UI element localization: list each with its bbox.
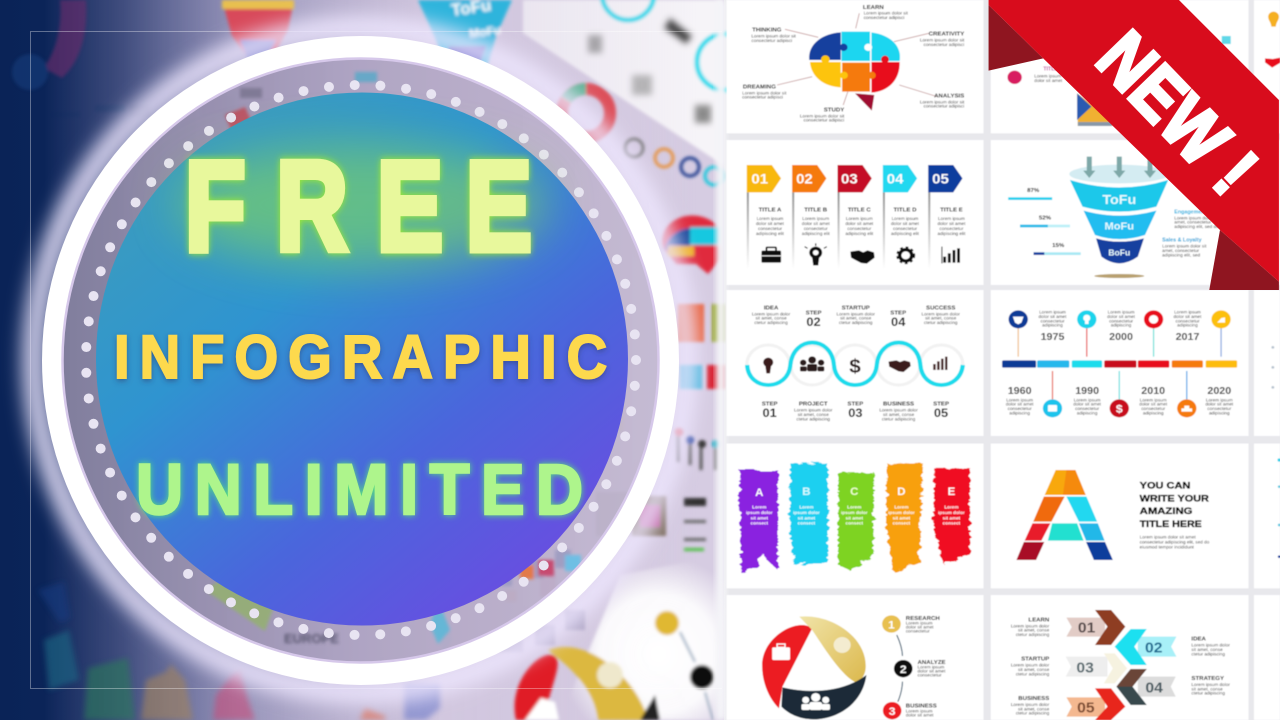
wave upper labels: sit amet, conse [925, 316, 956, 321]
chevron 01: 01 [1078, 620, 1096, 637]
timeline years and notes: consectetur [1040, 318, 1065, 323]
slide: third column top [1254, 0, 1280, 133]
wave upper labels: Lorem ipsum dolor [921, 311, 960, 316]
brain labels: Lorem ipsum dolor sit [920, 99, 964, 104]
wave upper labels: 04 [891, 315, 905, 329]
chevron labels: sit amet, conse [1018, 667, 1049, 672]
numbered badges: 1 [888, 619, 895, 631]
heading: FREE: FREE [185, 136, 532, 278]
bottom collage glimpses: EUROPE [284, 631, 339, 646]
tag 01: 01 [751, 172, 768, 187]
slide: partly hidden by ribbon: Lorem ipsum [1034, 73, 1061, 78]
ring inner lilac edge [62, 58, 658, 662]
percentage bars: 87% [1027, 187, 1039, 193]
tag 01 [747, 165, 781, 269]
badge labels: consectetur [917, 673, 942, 678]
tag text columns: dolor sit amet [802, 221, 830, 226]
funnel shadow [1094, 274, 1144, 278]
slide: third column bottom [1254, 595, 1280, 720]
tag 02: 02 [796, 172, 813, 187]
chevron 04 [1116, 669, 1176, 705]
icon: segmented letter A [1016, 470, 1113, 560]
wave lower labels: STEP [933, 400, 949, 407]
icon: handshake [889, 360, 911, 372]
chevron labels: ctetur adipiscing [1016, 632, 1049, 637]
chevron labels [1011, 616, 1230, 716]
title body text: Lorem ipsum dolor sit amet [1140, 535, 1196, 540]
title: you can write your amazing title here: TITLE HERE [1140, 519, 1202, 530]
timeline bar [1002, 360, 1237, 368]
brush letters and text: sit amet [893, 515, 910, 520]
brush letters and text: Lorem [944, 504, 959, 509]
funnel side text: Sales & Loyalty [1162, 238, 1202, 244]
slide: third column row three [1254, 290, 1280, 436]
title: you can write your amazing title here: WRITE YOUR [1140, 494, 1209, 504]
chevron labels: STRATEGY [1191, 675, 1224, 681]
slide: paint brushes [726, 443, 984, 588]
timeline years and notes: adipiscing [1077, 410, 1097, 415]
tag 04: 04 [887, 172, 903, 187]
timeline years and notes: Lorem ipsum [1039, 310, 1066, 315]
brush letters and text: sit amet [751, 515, 768, 520]
brain labels: consectetur adipisci [864, 15, 904, 20]
brain labels: Lorem ipsum dolor sit [920, 38, 964, 43]
percentage bars: 15% [1052, 242, 1064, 248]
panel: slide thumbnails [726, 0, 1280, 720]
title body text [1140, 535, 1209, 550]
timeline years and notes: 1975 [1041, 332, 1065, 343]
timeline years and notes: dolor sit amet [1139, 402, 1167, 407]
brain labels: ANALYSIS [934, 93, 964, 99]
timeline years and notes: Lorem ipsum [1108, 310, 1134, 315]
timeline top pins [1009, 310, 1231, 328]
tag text columns: adipiscing elit [937, 231, 966, 236]
slide: numbered tags [726, 140, 984, 285]
icon: people [800, 356, 824, 371]
ribbon band [989, 0, 1279, 282]
slide: partly hidden by ribbon: TITLE [1043, 67, 1059, 73]
timeline years and notes: adipiscing [1042, 323, 1063, 328]
wave lower labels: ctetur adipiscing [882, 416, 915, 421]
chevron labels: Lorem ipsum dolor [1011, 702, 1050, 707]
icon: briefcase [761, 247, 781, 263]
wave lower labels: 05 [934, 406, 948, 420]
brush letters and text: Lorem [752, 504, 766, 509]
timeline years and notes: consectetur [1207, 406, 1232, 411]
tag text columns: adipiscing elit [756, 231, 784, 236]
wave lower labels: STEP [762, 400, 778, 407]
funnel chart: BoFu [1108, 248, 1130, 257]
connector arc [897, 635, 902, 702]
tag text columns: consectetur [939, 226, 964, 231]
row of slides one and two (top) [726, 0, 1280, 285]
badge labels: Lorem ipsum [906, 708, 933, 713]
blue gradient disc [96, 92, 628, 626]
wave lower labels: PROJECT [799, 400, 828, 407]
timeline bottom pins: $ [1116, 403, 1123, 416]
timeline years and notes: dolor sit amet [1107, 314, 1135, 319]
wave backing circles [747, 345, 963, 385]
brush letters and text: Lorem [799, 504, 814, 509]
wave upper labels: STEP [890, 309, 906, 316]
timeline years and notes: dolor sit amet [1039, 314, 1067, 319]
chevron 05 [1066, 688, 1125, 720]
timeline years and notes: 2017 [1176, 332, 1200, 343]
wave lower labels: 01 [762, 406, 777, 420]
bottom paint blobs, dimmed [38, 582, 440, 720]
tag text columns: adipiscing elit [891, 231, 919, 236]
icon: light bulb [805, 243, 827, 265]
percentage bars: 52% [1039, 214, 1051, 221]
slide: chevrons [991, 595, 1249, 720]
icon: chart [933, 357, 947, 370]
percentage bars [1008, 187, 1081, 255]
wave upper labels: ctetur adipiscing [839, 320, 872, 325]
timeline years and notes: adipiscing [1009, 410, 1030, 415]
timeline years and notes: consectetur [1075, 406, 1099, 411]
slide: letter A [991, 443, 1249, 588]
tag text columns: adipiscing elit [802, 231, 830, 236]
brain labels: Lorem ipsum dolor sit [751, 34, 796, 39]
brush letters and text: consect [893, 521, 910, 526]
brain leader lines [777, 13, 937, 105]
badge labels: BUSINESS [906, 703, 937, 709]
tag 03 [837, 165, 872, 269]
tag text columns: TITLE E [940, 206, 963, 213]
timeline years and notes: consectetur [1175, 318, 1200, 323]
brush letters and text: B [802, 486, 811, 498]
callout: NEW ribbon [989, 0, 1279, 290]
timeline years and notes: dolor sit amet [1174, 314, 1202, 319]
timeline years and notes: adipiscing [1143, 410, 1164, 415]
brush letters and text: sit amet [798, 515, 815, 520]
tag text columns: TITLE B [804, 206, 827, 213]
tag text columns: Lorem ipsum [892, 216, 918, 221]
timeline years and notes: 2000 [1109, 332, 1133, 343]
chevron labels: LEARN [1028, 616, 1049, 623]
wave upper labels: sit amet, conse [840, 316, 871, 321]
bottom right white slide with circle [515, 555, 724, 720]
funnel side text: adipiscing elit, sed do [1174, 224, 1219, 229]
badge labels: dolor sit amet [906, 712, 934, 717]
chevron 02: 02 [1145, 640, 1162, 656]
funnel arrows [1083, 157, 1156, 178]
wave lower labels [762, 400, 949, 421]
top left slide shapes, dimmed [12, 0, 86, 90]
tag text columns: Lorem ipsum [802, 216, 829, 221]
slide: third column second row [1254, 140, 1280, 285]
timeline years and notes: dolor sit amet [1205, 402, 1233, 407]
badge labels: Lorem ipsum [917, 665, 944, 670]
tag text columns: consectetur [847, 226, 872, 231]
chevron labels: ctetur adipiscing [1016, 711, 1049, 716]
timeline years and notes: Lorem ipsum [1174, 310, 1201, 315]
wave upper labels: IDEA [764, 304, 778, 311]
tag 05 [928, 165, 962, 269]
badge labels: ANALYZE [917, 659, 946, 665]
brush letters and text: sit amet [846, 515, 863, 520]
timeline years and notes: adipiscing [1111, 323, 1131, 328]
funnel side text: amet, consectetur [1174, 220, 1211, 225]
numbered badges [882, 615, 912, 719]
timeline bottom pins [1043, 399, 1196, 417]
brush letters and text: D [897, 486, 906, 498]
wave lower labels: 03 [848, 406, 863, 420]
brush letters and text: consect [846, 521, 863, 526]
inner well of badge [60, 56, 660, 664]
row four and five slides [726, 443, 1280, 720]
tag text columns: TITLE C [848, 206, 871, 213]
chevron 01 [1066, 610, 1125, 645]
tag 02 [792, 165, 826, 269]
wave lower labels: STEP [847, 400, 863, 407]
brush letters and text: ipsum dolor [793, 510, 820, 515]
timeline years and notes: Lorem ipsum [1006, 397, 1033, 402]
tag text columns: dolor sit amet [845, 221, 873, 226]
brain labels: Lorem ipsum dolor sit [742, 90, 787, 95]
brain labels: consectetur adipisci [924, 104, 964, 109]
chevron labels: sit amet, conse [1191, 686, 1223, 691]
tag text columns: Lorem ipsum [938, 216, 965, 221]
brush letters and text: A [755, 487, 763, 499]
tag text columns: dolor sit amet [891, 221, 919, 226]
timeline years and notes: consectetur [1109, 318, 1133, 323]
brain labels: STUDY [824, 107, 845, 113]
icon: gear [897, 247, 914, 263]
wave upper labels [752, 304, 960, 329]
chevron labels: ctetur adipiscing [1191, 651, 1225, 656]
badge labels: RESEARCH [906, 615, 940, 621]
timeline years and notes [1006, 310, 1233, 415]
icon: handshake [850, 250, 875, 264]
brain labels: consectetur adipisci [742, 95, 783, 100]
soft white edge of collage [716, 0, 726, 720]
icon: bar chart [941, 247, 960, 263]
funnel side text: Lorem ipsum dolor sit [1174, 215, 1219, 220]
brush letters and text [746, 486, 965, 526]
circular diagram [762, 616, 866, 719]
wave upper labels: ctetur adipiscing [754, 320, 788, 325]
tag text columns: consectetur [804, 226, 828, 231]
wave lower labels: Lorem ipsum dolor [794, 408, 833, 413]
wave upper labels: STEP [806, 309, 822, 316]
funnel side text [1162, 209, 1219, 257]
row three slides [726, 290, 1280, 436]
brain labels: DREAMING [743, 83, 776, 90]
chevron labels: ctetur adipiscing [1016, 671, 1049, 676]
timeline years and notes: Lorem ipsum [1206, 397, 1233, 402]
funnel chart: MoFu [1105, 221, 1134, 232]
wave lower labels: sit amet, conse [883, 412, 914, 417]
heading: UNLIMITED: UNLIMITED [136, 451, 583, 530]
chevron labels: STARTUP [1021, 656, 1049, 662]
funnel side text: Lorem ipsum dolor sit [1162, 244, 1207, 249]
timeline years and notes: adipiscing [1209, 410, 1230, 415]
wave lower labels: Lorem ipsum dolor [879, 408, 918, 413]
slide: circular triad [726, 595, 984, 720]
green haze behind FREE [177, 143, 547, 267]
brain labels: consectetur adipisci [804, 118, 844, 123]
timeline years and notes: consectetur [1008, 406, 1032, 411]
brain labels: Lorem ipsum dolor sit [864, 11, 908, 16]
brain labels [742, 4, 965, 123]
badge labels [906, 615, 946, 717]
chevron 03: 03 [1076, 660, 1094, 676]
frame: thin outline [30, 32, 722, 688]
timeline years and notes: dolor sit amet [1073, 402, 1101, 407]
numbered badges: 2 [900, 663, 907, 676]
bottom collage glimpses [205, 72, 581, 646]
title body text: consectetur adipiscing elit, sed do [1140, 540, 1209, 545]
panel: right slide grid background [720, 0, 1280, 720]
tag 05: 05 [932, 172, 949, 187]
tag text columns: Lorem ipsum [846, 216, 873, 221]
slide: puzzle brain [726, 0, 984, 133]
brain labels: consectetur adipisci [924, 42, 964, 47]
wave upper labels: 02 [806, 315, 821, 329]
timeline years and notes: 2020 [1207, 386, 1231, 397]
badge labels: dolor sit amet [917, 669, 946, 674]
collage blurred slide shapes [50, 0, 753, 654]
panel: blurred left collage background [0, 0, 753, 720]
chevron 05: 05 [1077, 700, 1095, 716]
tag text columns: adipiscing elit [845, 231, 873, 236]
funnel chart: ToFu [1102, 191, 1136, 207]
brush letters and text: consect [798, 521, 815, 526]
title: you can write your amazing title here: YOU CAN [1140, 481, 1190, 491]
tag 04 [883, 165, 917, 269]
funnel side text: adipiscing elit, sed [1162, 252, 1200, 257]
brain labels: THINKING [752, 27, 781, 33]
title: you can write your amazing title here: AMAZING [1140, 506, 1192, 517]
badge labels: consectetur [906, 629, 930, 634]
brush letters and text: consect [943, 521, 960, 526]
brush strokes [740, 463, 970, 573]
wave upper labels: SUCCESS [926, 304, 955, 311]
slide: wave process [726, 290, 984, 436]
timeline stems [1018, 327, 1221, 400]
wave upper labels: Lorem ipsum dolor [752, 311, 791, 316]
tag text columns: dolor sit amet [756, 221, 784, 226]
heading: INFOGRAPHIC: INFOGRAPHIC [114, 324, 607, 392]
numbered badges: 3 [889, 705, 896, 718]
chevron labels: Lorem ipsum dolor [1011, 623, 1050, 628]
badge labels: dolor sit amet [906, 625, 934, 630]
wave lower labels: sit amet, conse [798, 412, 829, 417]
slide: timeline [991, 290, 1249, 436]
slide: funnel [991, 140, 1249, 285]
wave upper labels: ctetur adipiscing [924, 320, 957, 325]
brush letters and text: ipsum dolor [841, 510, 868, 515]
chevron labels: sit amet, conse [1018, 706, 1049, 711]
wave lower labels: ctetur adipiscing [796, 416, 830, 421]
wave upper labels: Lorem ipsum dolor [836, 311, 875, 316]
brush letters and text: sit amet [943, 515, 960, 520]
tag text columns: consectetur [758, 226, 782, 231]
white ring [42, 36, 679, 685]
brain labels: LEARN [863, 4, 884, 10]
timeline years and notes: consectetur [1141, 406, 1165, 411]
funnel chart [1069, 165, 1169, 263]
chevron labels: sit amet, conse [1191, 647, 1223, 652]
brush letters and text: Lorem [847, 504, 861, 509]
brush letters and text: consect [751, 521, 768, 526]
chevron labels: IDEA [1191, 636, 1206, 642]
top slides showing through the wash [222, 0, 512, 64]
tag text columns: Lorem ipsum [757, 216, 783, 221]
wave upper labels: STARTUP [842, 304, 870, 311]
timeline years and notes: Lorem ipsum [1140, 397, 1167, 402]
brain labels: consectetur adipisci [751, 38, 792, 43]
chevron labels: Lorem ipsum dolor [1191, 643, 1230, 648]
dotted ring [86, 85, 636, 635]
badge labels: Lorem ipsum [906, 621, 933, 626]
brush letters and text: C [850, 486, 858, 498]
title: you can write your amazing title here [1140, 481, 1209, 530]
slide: third column row four [1254, 443, 1280, 588]
tag text columns: TITLE D [894, 206, 916, 213]
icon: puzzle brain [809, 32, 900, 111]
wave upper labels: sit amet, conse [755, 316, 787, 321]
funnel side text: Engagement [1174, 209, 1207, 215]
wave line [747, 342, 963, 385]
chevron 03 [1066, 653, 1127, 683]
tag text columns: consectetur [893, 226, 917, 231]
timeline years and notes: 1990 [1075, 386, 1099, 397]
panel: main circular badge [34, 28, 686, 692]
chevron 04: 04 [1145, 680, 1163, 696]
navy left fade [0, 0, 440, 720]
timeline years and notes: Lorem ipsum [1074, 397, 1101, 402]
brush letters and text: E [948, 486, 955, 498]
funnel side text: amet, consectetur [1162, 248, 1199, 253]
timeline years and notes: 1960 [1008, 386, 1032, 397]
brain labels: CREATIVITY [929, 31, 965, 37]
brush letters and text: ipsum dolor [888, 510, 915, 515]
slide: partly hidden by ribbon [991, 0, 1249, 133]
brush letters and text: ipsum dolor [746, 510, 773, 515]
tag 03: 03 [841, 172, 858, 187]
brush letters and text: Lorem [894, 504, 909, 509]
chevron 02 [1115, 629, 1176, 665]
chevron labels: Lorem ipsum dolor [1191, 682, 1230, 687]
wave lower labels: BUSINESS [883, 400, 914, 407]
tag text columns: dolor sit amet [937, 221, 965, 226]
chevron labels: Lorem ipsum dolor [1011, 663, 1050, 668]
brush letters and text: ipsum dolor [938, 510, 965, 515]
icon: bulb [763, 358, 773, 373]
timeline years and notes: 2010 [1141, 386, 1165, 397]
tag text columns [756, 206, 966, 236]
tag text columns: TITLE A [759, 206, 781, 213]
timeline years and notes: dolor sit amet [1006, 402, 1034, 407]
lavender wash over collage [0, 0, 700, 720]
brain labels: Lorem ipsum dolor sit [800, 113, 844, 118]
slide: partly hidden by ribbon: dolor sit amet [1034, 78, 1062, 83]
chevron labels: ctetur adipiscing [1191, 691, 1225, 696]
chevron labels: BUSINESS [1018, 695, 1049, 701]
ribbon dark folds [989, 5, 1279, 290]
timeline years and notes: adipiscing [1177, 323, 1198, 328]
title body text: eiusmod tempor incididunt [1140, 545, 1194, 550]
icon: dollar: $ [849, 356, 861, 377]
top slides showing through the wash: MoFu [468, 23, 502, 41]
chevron labels: sit amet, conse [1018, 628, 1049, 633]
